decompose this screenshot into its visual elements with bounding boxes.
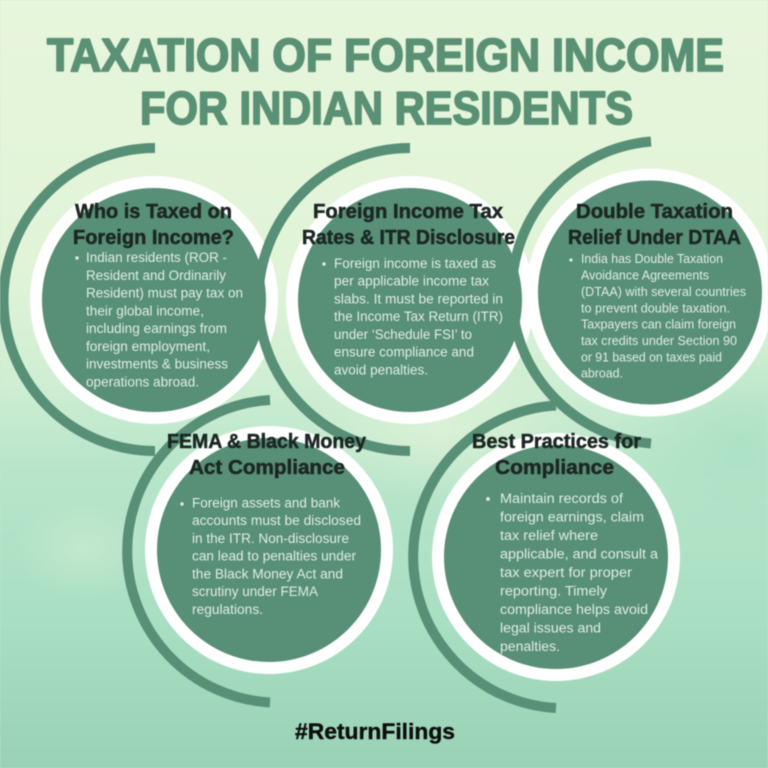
text: double taxation relief: to prevent double taxation.: [581, 301, 730, 315]
title: TAXATION OF FOREIGN INCOME: [47, 29, 724, 81]
text: double taxation relief: (DTAA) with several countries: [581, 285, 746, 299]
text: foreign income tax rates: ensure compliance and: [334, 345, 474, 360]
text: foreign income tax rates: avoid penalties.: [334, 362, 428, 378]
text: who is taxed: [75, 250, 243, 390]
text: best practices: legal issues and: [500, 620, 601, 636]
text: best practices: compliance helps avoid: [500, 602, 648, 618]
text: double taxation relief: abroad.: [581, 367, 623, 381]
text: foreign income tax rates: slabs. It must be reported in: [334, 292, 503, 306]
text: FEMA and black money: Foreign assets and bank: [192, 496, 340, 510]
heading: FEMA and black money: [167, 431, 367, 479]
heading: who is taxed: [73, 201, 234, 249]
text: double taxation relief: [569, 252, 746, 381]
text: best practices: Maintain records of: [500, 491, 623, 507]
heading: who is taxed: Who is Taxed on: [75, 201, 232, 223]
heading: FEMA and black money: Act Compliance: [189, 457, 345, 479]
text: foreign income tax rates: [322, 256, 503, 378]
text: double taxation relief: or 91 based on taxes paid: [581, 350, 722, 364]
heading: double taxation relief: Relief Under DTAA: [568, 227, 741, 249]
panel: FEMA and black money, circle and arc: [127, 400, 393, 702]
text: foreign income tax rates: the Income Tax Return (ITR): [334, 309, 503, 324]
text: FEMA and black money: in the ITR. Non-disclosure: [192, 531, 349, 546]
heading: who is taxed: Foreign Income?: [73, 227, 234, 249]
text: foreign income tax rates: under ‘Schedule FSI’ to: [334, 327, 472, 342]
panel: who is taxed, circle and arc: [3, 148, 278, 451]
heading: best practices: Best Practices for: [472, 431, 641, 453]
text: who is taxed: investments & business: [86, 357, 228, 372]
text: FEMA and black money: regulations.: [192, 602, 263, 617]
text: double taxation relief: tax credits under Section 90: [581, 334, 737, 348]
text: best practices: applicable, and consult a: [500, 546, 658, 562]
text: who is taxed: Indian residents (ROR -: [86, 250, 227, 265]
text: double taxation relief: Avoidance Agreements: [581, 268, 709, 282]
text: best practices: foreign earnings, claim: [500, 510, 644, 526]
heading: foreign income tax rates: [302, 201, 515, 249]
heading: foreign income tax rates: Foreign Income Tax: [313, 201, 503, 223]
heading: double taxation relief: Double Taxation: [576, 201, 733, 223]
text: foreign income tax rates: Foreign income is taxed as: [334, 256, 496, 271]
text: double taxation relief: Taxpayers can claim foreign: [581, 318, 736, 332]
text: FEMA and black money: accounts must be disclosed: [192, 513, 361, 528]
heading: foreign income tax rates: Rates & ITR Disclosure: [302, 227, 515, 249]
panel: foreign income tax rates, circle and arc: [258, 148, 534, 451]
panel: double taxation relief, circle and arc: [512, 142, 768, 444]
heading: best practices: Compliance: [495, 457, 614, 479]
text: FEMA and black money: can lead to penalties under: [192, 549, 357, 564]
text: FEMA and black money: scrutiny under FEMA: [192, 584, 318, 599]
heading: double taxation relief: [568, 201, 741, 249]
heading: best practices: [472, 431, 641, 479]
text: who is taxed: including earnings from: [86, 321, 227, 336]
text: FEMA and black money: the Black Money Act and: [192, 566, 343, 582]
title: [47, 29, 724, 134]
text: who is taxed: operations abroad.: [86, 374, 199, 390]
text: double taxation relief: India has Double Taxation: [581, 252, 723, 266]
panel: best practices, circle and arc: [413, 406, 680, 708]
text: foreign income tax rates: per applicable income tax: [334, 274, 489, 289]
footer hashtag: #ReturnFilings: [295, 719, 455, 744]
text: best practices: penalties.: [500, 639, 560, 655]
text: best practices: [486, 491, 658, 655]
text: best practices: reporting. Timely: [500, 584, 608, 600]
text: best practices: tax relief where: [500, 528, 598, 544]
text: who is taxed: Resident) must pay tax on: [86, 286, 243, 300]
text: FEMA and black money: [180, 496, 361, 617]
text: who is taxed: Resident and Ordinarily: [86, 268, 226, 283]
text: best practices: tax expert for proper: [500, 565, 632, 581]
text: who is taxed: their global income,: [86, 303, 204, 318]
text: who is taxed: foreign employment,: [86, 339, 210, 354]
title: FOR INDIAN RESIDENTS: [140, 82, 633, 134]
heading: FEMA and black money: FEMA & Black Money: [167, 431, 367, 453]
